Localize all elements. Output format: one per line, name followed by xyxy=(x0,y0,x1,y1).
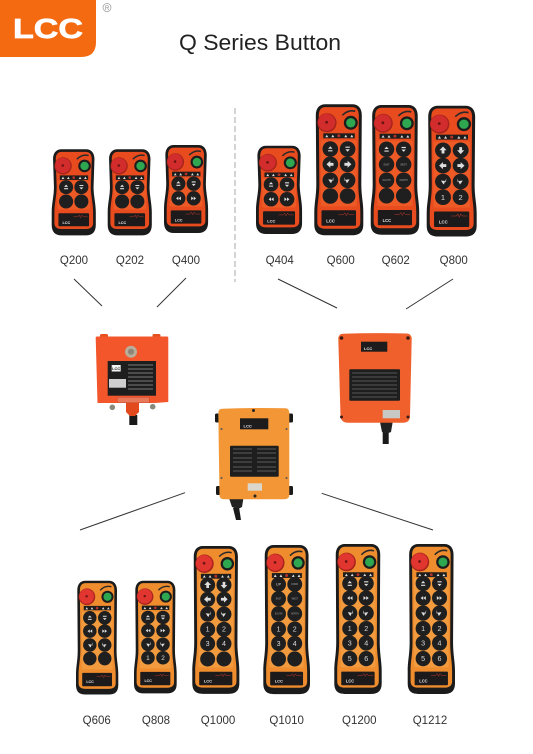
receiver, red with antenna xyxy=(96,334,168,425)
remote Q606: LCC xyxy=(86,680,94,684)
remote Q1212: 4 xyxy=(438,640,442,648)
remote Q808: 2 xyxy=(161,655,165,662)
model labels, bottom row: Q1010 xyxy=(269,715,304,727)
connector lines, top xyxy=(74,278,453,309)
remote Q800: 1 xyxy=(441,193,445,202)
model labels, top row: Q800 xyxy=(440,255,468,267)
remote Q1000: 4 xyxy=(222,640,226,648)
remote Q1010: 3 xyxy=(277,640,281,648)
model labels, bottom row: Q808 xyxy=(142,715,170,727)
remote Q1010: 2 xyxy=(293,625,297,633)
remote Q200 xyxy=(52,149,96,235)
remote Q1000 xyxy=(192,546,239,694)
remote Q1010: 4 xyxy=(293,640,297,648)
remote Q1000: LCC xyxy=(204,678,212,683)
remote Q1212: 1 xyxy=(421,625,425,633)
remote Q1200: 4 xyxy=(364,640,368,648)
remote Q1200: 5 xyxy=(348,655,352,663)
remote Q1010 xyxy=(263,545,310,694)
model labels, top row xyxy=(60,255,468,267)
remote Q1212: 6 xyxy=(438,655,442,663)
remote Q400 xyxy=(164,145,208,233)
remote Q1010: WEST xyxy=(292,599,299,601)
remote Q1200: 6 xyxy=(364,655,368,663)
remote Q1212 xyxy=(408,544,455,694)
connector lines, bottom xyxy=(80,493,433,530)
remote Q1200 xyxy=(334,544,382,694)
title: Q Series Button xyxy=(179,30,341,55)
remote Q1010: EAST xyxy=(276,598,282,601)
divider between groups xyxy=(234,108,236,282)
registered mark: R xyxy=(105,6,110,12)
logo badge: LCC xyxy=(13,13,83,44)
model labels, top row: Q200 xyxy=(60,255,88,267)
model labels, bottom row: Q1000 xyxy=(201,715,235,727)
remote Q1200: 1 xyxy=(348,625,352,633)
remote Q600 xyxy=(314,104,363,235)
remote Q1010: LCC xyxy=(275,678,283,683)
remote Q400: LCC xyxy=(175,218,183,222)
remote Q800: LCC xyxy=(439,220,448,224)
remote Q602: LCC xyxy=(383,218,391,223)
model labels, top row: Q202 xyxy=(116,255,144,267)
remote Q1010: NORTH xyxy=(291,614,299,616)
remote Q602: EAST xyxy=(384,163,390,166)
remote Q1000: 3 xyxy=(206,640,210,648)
receiver, orange centre: LCC xyxy=(244,424,252,428)
remote Q1010: SOUTH xyxy=(275,614,283,616)
remote Q606 xyxy=(76,581,118,695)
remote Q1212: LCC xyxy=(419,678,428,683)
remote Q404 xyxy=(256,146,302,234)
remote Q808: LCC xyxy=(144,679,152,683)
remote Q602: WEST xyxy=(400,164,408,166)
remote Q1000: 1 xyxy=(206,626,210,634)
remote Q1200: 3 xyxy=(348,640,352,648)
model labels, bottom row: Q1212 xyxy=(413,715,447,727)
model labels, bottom row: Q1200 xyxy=(342,715,377,727)
remote Q1200: 2 xyxy=(364,625,368,633)
model labels, top row: Q600 xyxy=(327,255,355,267)
remote Q602 xyxy=(371,105,419,235)
receiver, red with antenna: LCC xyxy=(112,366,120,371)
remote Q202: LCC xyxy=(118,221,127,225)
remote Q1212: 5 xyxy=(421,655,425,663)
remote Q808 xyxy=(134,581,177,693)
remote Q1200: LCC xyxy=(346,678,354,683)
remote Q200: LCC xyxy=(63,221,71,225)
remote Q808: 1 xyxy=(146,655,150,662)
remote Q602: SOUTH xyxy=(383,180,391,182)
remote Q1212: 3 xyxy=(421,640,425,648)
remote Q1212: 2 xyxy=(438,625,442,633)
remote Q602: NORTH xyxy=(400,180,408,182)
remote Q600: LCC xyxy=(326,218,335,223)
remote Q1010: UP xyxy=(276,583,282,587)
model labels, top row: Q602 xyxy=(382,255,410,267)
remote Q202 xyxy=(108,149,152,235)
model labels, bottom row: Q606 xyxy=(83,715,111,727)
model labels, bottom row xyxy=(83,715,447,727)
registered mark xyxy=(103,4,111,12)
remote Q1010: 1 xyxy=(277,625,281,633)
remote Q800 xyxy=(427,106,477,236)
model labels, top row: Q400 xyxy=(172,255,200,267)
model labels, top row: Q404 xyxy=(266,255,294,267)
remote Q1010: DOWN xyxy=(291,584,299,586)
remote Q404: LCC xyxy=(267,218,276,223)
remote Q800: 2 xyxy=(459,193,463,202)
receiver, orange-red right: LCC xyxy=(364,346,372,351)
logo badge xyxy=(0,0,96,57)
remote Q1000: 2 xyxy=(222,626,226,634)
receiver, orange centre xyxy=(215,408,293,520)
receiver, orange-red right xyxy=(338,333,412,444)
